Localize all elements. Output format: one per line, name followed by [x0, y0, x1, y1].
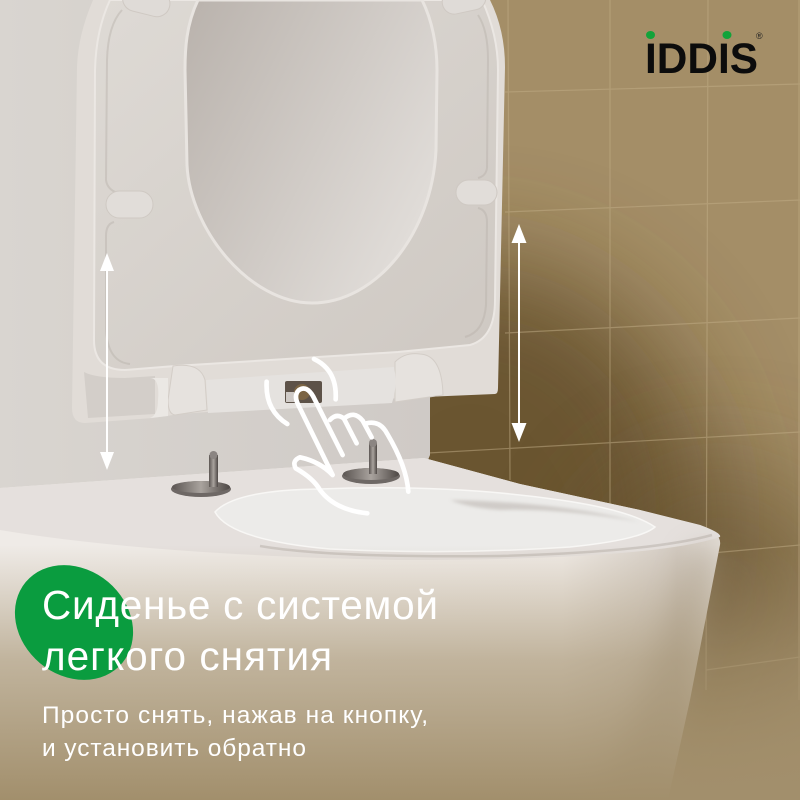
bottom fade overlay — [0, 545, 800, 800]
subtitle — [42, 702, 428, 762]
logo dot right — [722, 31, 732, 39]
bumper top right — [440, 0, 488, 16]
logo dot left — [646, 31, 655, 39]
title: Сиденье с системой — [42, 582, 438, 628]
title — [42, 582, 438, 679]
seat outline — [72, 0, 505, 423]
hinge bar — [206, 367, 396, 413]
registered mark: ® — [756, 31, 763, 41]
left hinge cap — [150, 378, 168, 418]
right mounting post — [342, 439, 400, 484]
right side body shading — [600, 545, 720, 800]
release button — [285, 381, 322, 403]
toilet bowl — [0, 458, 720, 800]
rim highlight line — [260, 535, 712, 556]
right hinge — [395, 354, 443, 402]
logo wordmark: IDDIS — [645, 35, 758, 83]
title: легкого снятия — [42, 633, 332, 679]
inner ridge left — [106, 10, 130, 364]
left mounting post — [171, 451, 231, 497]
bowl rim shading — [0, 458, 720, 560]
subtitle: и установить обратно — [42, 735, 306, 762]
left hinge — [168, 365, 207, 415]
right double arrow — [512, 224, 526, 442]
seat hole — [185, 0, 437, 303]
raised toilet seat — [72, 0, 505, 423]
bumper mid right — [456, 180, 497, 205]
lower-left tray — [84, 372, 155, 418]
left double arrow — [100, 253, 114, 470]
subtitle: Просто снять, нажав на кнопку, — [42, 702, 428, 729]
bowl opening — [215, 488, 655, 552]
inner bowl shadow — [450, 500, 640, 522]
inner ridge right — [465, 15, 488, 337]
cistern tank — [0, 0, 430, 495]
bumper top left — [120, 0, 173, 19]
icon: pressing hand — [267, 359, 408, 513]
inner seat plate — [94, 0, 498, 370]
logo — [645, 31, 763, 83]
green accent blob — [0, 541, 156, 704]
bumper mid left — [106, 191, 153, 218]
